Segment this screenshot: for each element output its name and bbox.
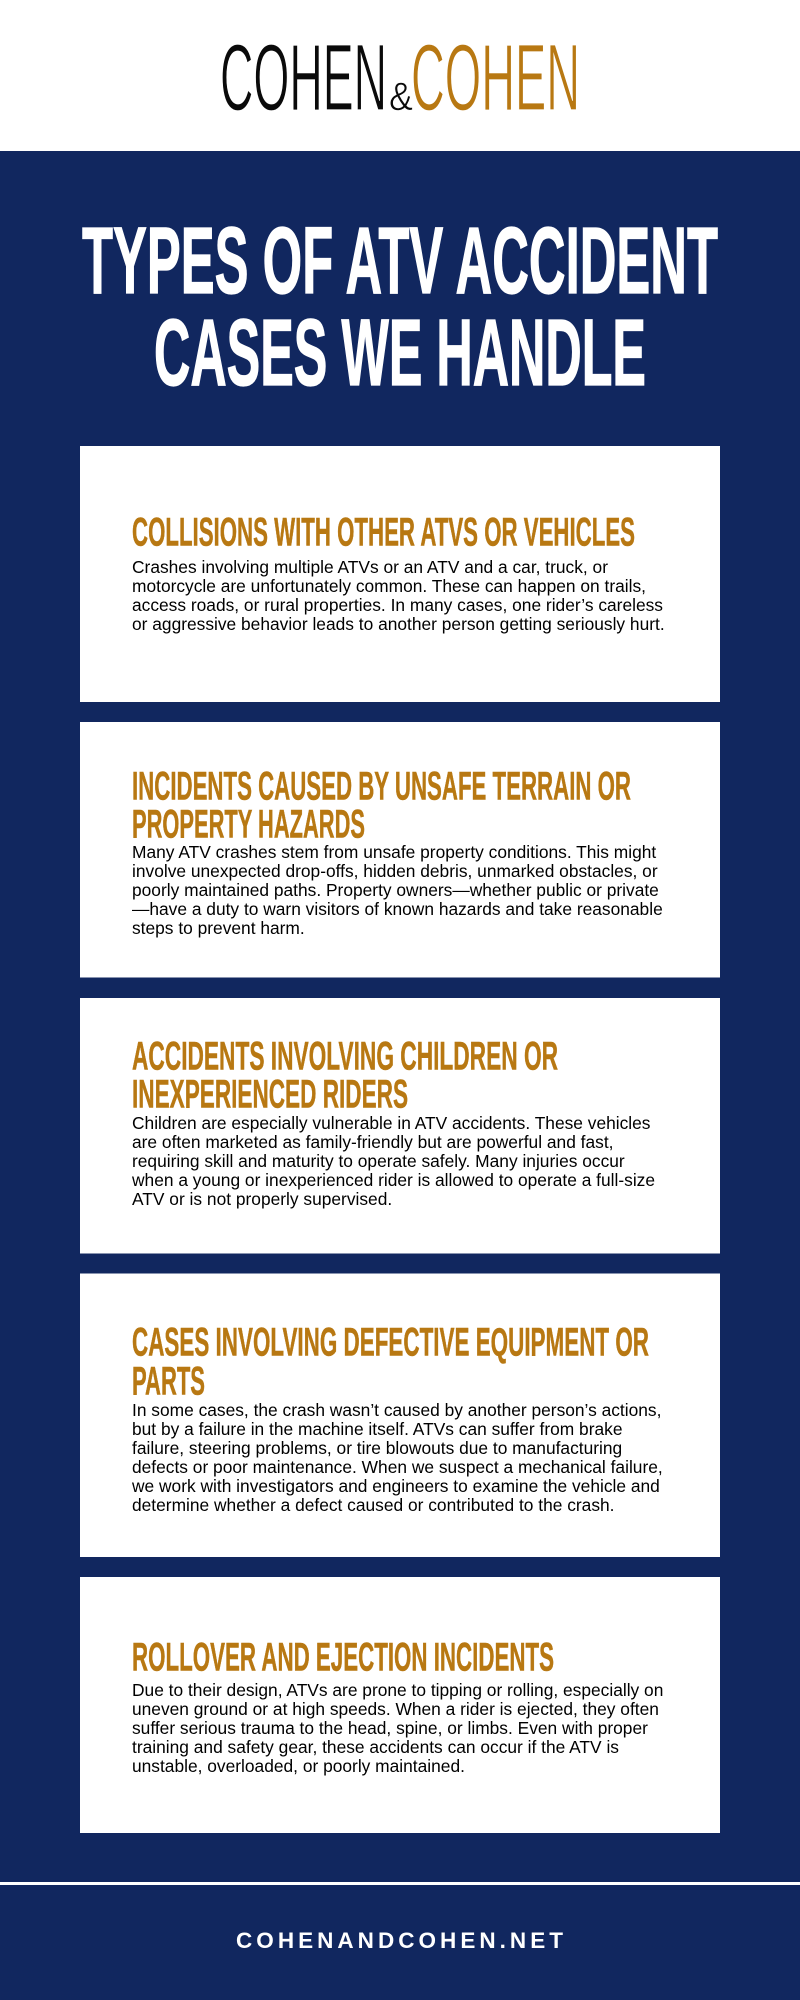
text: defective equipment: In some cases, the crash wasn’t caused by another person’s actions, — [132, 1400, 661, 1420]
text: children: are often marketed as family-friendly but are powerful and fast, — [132, 1132, 613, 1152]
text: rollover: uneven ground or at high speeds. When a rider is ejected, they often — [132, 1699, 659, 1719]
text: children: when a young or inexperienced rider is allowed to operate a full-size — [131, 1170, 655, 1190]
text: unsafe terrain: Many ATV crashes stem from unsafe property conditions. This might — [132, 842, 656, 862]
header band — [0, 0, 800, 151]
text: unsafe terrain: involve unexpected drop-offs, hidden debris, unmarked obstacles, or — [132, 861, 658, 881]
text: unsafe terrain: —have a duty to warn visitors of known hazards and take reasonable — [132, 899, 663, 919]
text: rollover: Due to their design, ATVs are prone to tipping or rolling, especially on — [132, 1680, 663, 1700]
text: rollover — [132, 1680, 663, 1776]
title — [82, 208, 718, 406]
text: unsafe terrain: steps to prevent harm. — [132, 918, 305, 938]
text: defective equipment: we work with investigators and engineers to examine the vehicle and — [131, 1476, 660, 1496]
heading: unsafe terrain — [132, 764, 631, 846]
heading: children: INEXPERIENCED RIDERS — [132, 1072, 408, 1116]
text: collisions — [132, 557, 665, 634]
panel: defective equipment — [80, 1274, 720, 1557]
heading: unsafe terrain: PROPERTY HAZARDS — [132, 802, 365, 846]
text: defective equipment: but by a failure in the machine itself. ATVs can suffer from brake — [132, 1419, 622, 1439]
panel: children — [80, 998, 720, 1254]
text: collisions: motorcycle are unfortunately common. These can happen on trails, — [132, 576, 646, 596]
text: collisions: Crashes involving multiple ATVs or an ATV and a car, truck, or — [132, 557, 608, 577]
text: children: ATV or is not properly supervised. — [132, 1189, 392, 1209]
heading: defective equipment — [132, 1320, 649, 1404]
text: children: Children are especially vulnerable in ATV accidents. These vehicles — [132, 1113, 651, 1133]
text: children — [131, 1113, 655, 1209]
text: defective equipment: defects or poor maintenance. When we suspect a mechanical failure, — [132, 1457, 663, 1477]
text: rollover: training and safety gear, these accidents can occur if the ATV is — [132, 1737, 619, 1757]
panel: collisions — [80, 446, 720, 702]
heading: defective equipment: PARTS — [132, 1360, 205, 1404]
text: children: requiring skill and maturity to operate safely. Many injuries occur — [132, 1151, 625, 1171]
text: rollover: unstable, overloaded, or poorly maintained. — [132, 1756, 465, 1776]
text: defective equipment: failure, steering problems, or tire blowouts due to manufacturing — [132, 1438, 622, 1458]
panel: rollover — [80, 1577, 720, 1833]
heading: children — [132, 1034, 558, 1116]
logo: Cohen & Cohen: COHEN — [220, 25, 387, 131]
text: unsafe terrain: poorly maintained paths. Property owners—whether public or private — [132, 880, 659, 900]
text: defective equipment — [131, 1400, 663, 1515]
text: rollover: suffer serious trauma to the head, spine, or limbs. Even with proper — [132, 1718, 648, 1738]
text: COHEN — [411, 25, 580, 131]
text: collisions: or aggressive behavior leads to another person getting seriously hurt. — [132, 614, 665, 634]
text: defective equipment: determine whether a defect caused or contributed to the crash. — [132, 1495, 614, 1515]
text: unsafe terrain — [132, 842, 663, 938]
logo: Cohen & Cohen: & — [389, 75, 413, 119]
panel: unsafe terrain — [80, 722, 720, 978]
text: collisions: access roads, or rural properties. In many cases, one rider’s careless — [132, 595, 663, 615]
footer website: COHENANDCOHEN.NET — [236, 1928, 563, 1953]
